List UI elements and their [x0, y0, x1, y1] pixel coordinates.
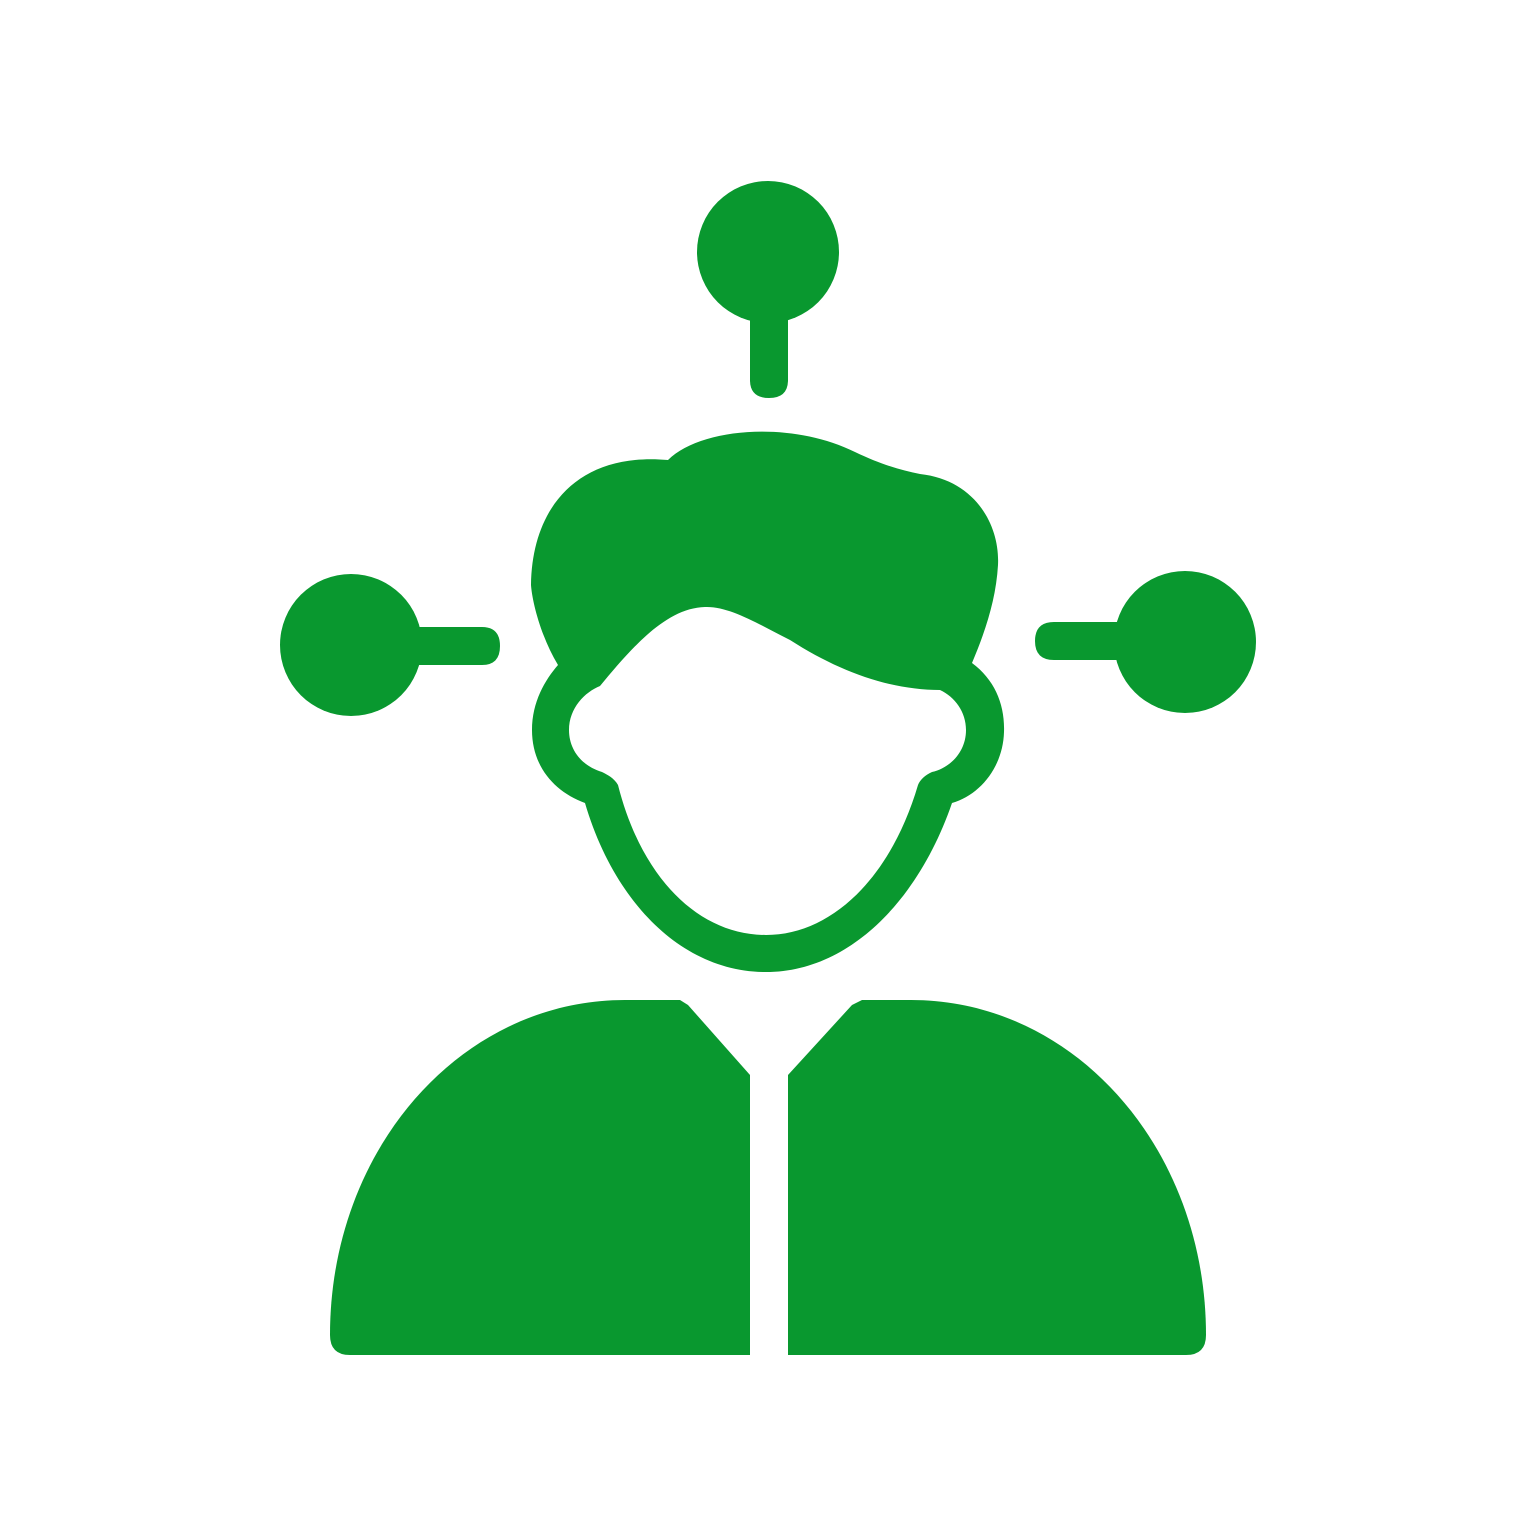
icon: left node	[280, 574, 500, 716]
icon: head	[531, 432, 1004, 972]
icon: top node	[697, 181, 839, 398]
icon: right node	[1035, 571, 1256, 713]
icon: body	[330, 1000, 1206, 1355]
